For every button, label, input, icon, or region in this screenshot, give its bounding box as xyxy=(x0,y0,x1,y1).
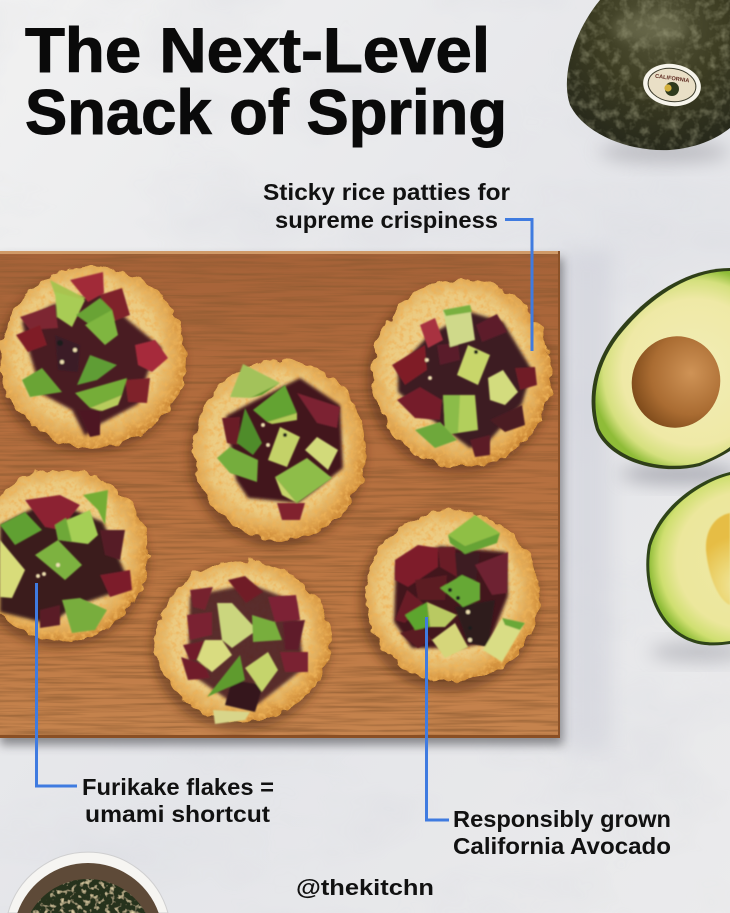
icon: bowl of furikake xyxy=(8,852,168,913)
callout: sticky rice patties: Sticky rice patties for xyxy=(263,179,510,205)
callout: sticky rice patties: supreme crispiness xyxy=(275,207,498,233)
callout: sticky rice patties xyxy=(263,179,532,351)
arrow: avocado leader line xyxy=(426,617,449,820)
pit cavity xyxy=(706,513,730,605)
callout: California avocado: Responsibly grown xyxy=(453,806,671,832)
title: Snack of Spring xyxy=(25,78,507,148)
title: The Next-Level xyxy=(25,16,490,86)
callout: furikake flakes: Furikake flakes = xyxy=(82,774,274,800)
patty: lower left xyxy=(0,469,148,648)
title xyxy=(25,16,507,148)
icon: avocado half without pit xyxy=(646,472,730,661)
arrow: patties leader line xyxy=(505,220,532,351)
arrow: furikake leader line xyxy=(36,583,77,786)
sticker: California xyxy=(640,60,704,110)
patty: lower right xyxy=(360,510,539,692)
icon: avocado half with pit xyxy=(592,268,730,484)
callout: California avocado xyxy=(426,617,671,859)
patty: top left xyxy=(0,267,186,453)
credit handle: @thekitchn xyxy=(296,875,434,900)
sticker: California: CALIFORNIA xyxy=(655,74,690,84)
callout: California avocado: California Avocado xyxy=(453,833,671,859)
callout: furikake flakes: umami shortcut xyxy=(85,801,270,827)
avocado pit xyxy=(618,323,730,441)
patty: centre xyxy=(189,360,366,546)
icon: whole avocado with sticker xyxy=(567,0,730,163)
patty: top right xyxy=(367,279,552,473)
cutting board xyxy=(0,251,563,745)
callout: furikake flakes xyxy=(36,583,274,827)
patty: bottom centre xyxy=(151,561,330,730)
